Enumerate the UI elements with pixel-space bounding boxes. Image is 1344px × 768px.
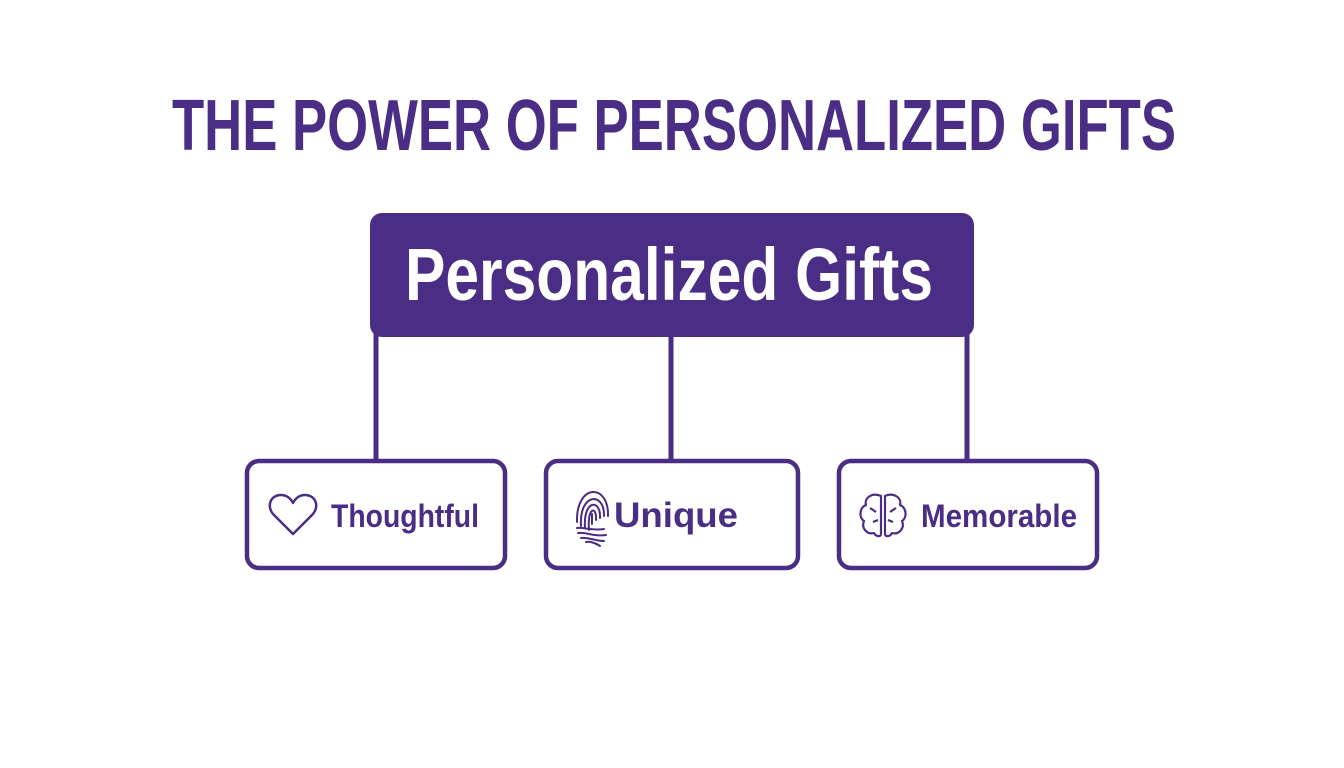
card: Unique: Unique	[614, 496, 738, 535]
card: Thoughtful	[247, 461, 505, 568]
card: Unique	[546, 461, 798, 568]
icon: heart	[270, 495, 316, 534]
icon: fingerprint	[577, 492, 608, 546]
main box: Personalized Gifts: Personalized Gifts	[405, 233, 933, 316]
main box: Personalized Gifts	[370, 213, 974, 337]
icon: brain	[860, 495, 906, 536]
card: Thoughtful: Thoughtful	[331, 498, 479, 534]
card: Memorable	[839, 461, 1097, 568]
connector lines	[376, 320, 967, 461]
card: Memorable: Memorable	[921, 498, 1077, 534]
